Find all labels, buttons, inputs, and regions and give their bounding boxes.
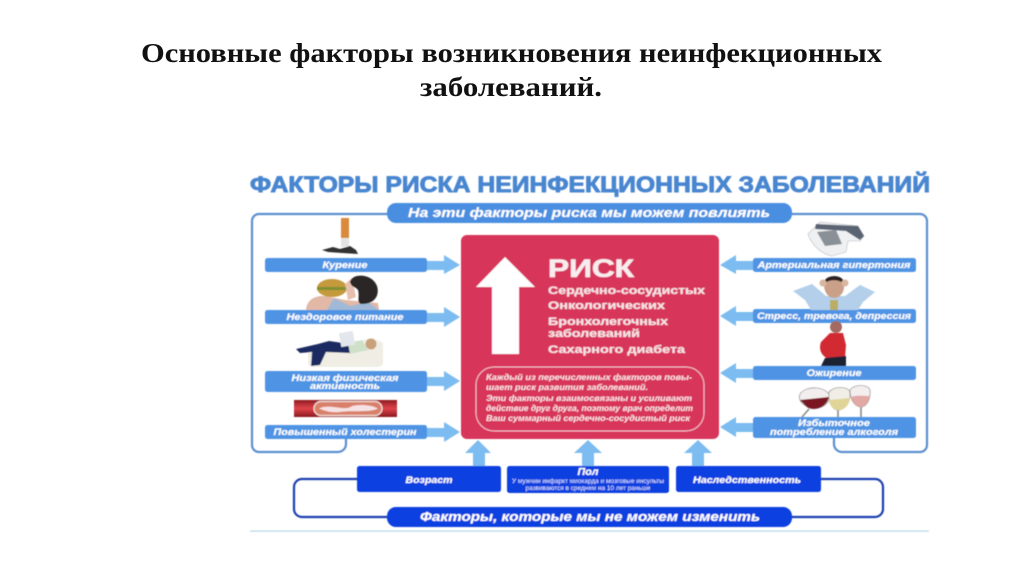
box: sex: развиваются в среднем на 10 лет раньше xyxy=(526,486,651,492)
box: age xyxy=(357,466,501,492)
risk note: действие друг друга, поэтому врач определит xyxy=(486,404,693,413)
arrows: left factors to risk xyxy=(427,255,460,442)
infographic xyxy=(250,172,930,532)
icon: person on sofa xyxy=(296,331,383,367)
bar: stress xyxy=(753,309,916,323)
bar: high cholesterol xyxy=(265,425,427,439)
frame: modifiable factors xyxy=(252,214,927,452)
pill: modifiable factors heading xyxy=(387,203,792,223)
slide title: Основные факторы возникновения неинфекционных xyxy=(141,38,883,68)
pill: fixed factors heading xyxy=(387,507,792,527)
icon: white up arrow xyxy=(476,257,535,354)
icon: stressed man xyxy=(793,276,875,310)
risk note: Эти факторы взаимосвязаны и усиливают xyxy=(486,394,692,403)
arrows: right factors to risk xyxy=(720,255,753,437)
box: age: Возраст xyxy=(406,475,453,486)
loop: fixed factors xyxy=(294,479,883,517)
bar: obesity xyxy=(753,366,916,380)
bar: smoking xyxy=(265,258,427,272)
box: sex: У мужчин инфаркт миокарда и мозговые инсульты xyxy=(512,479,664,485)
risk heading: РИСК xyxy=(548,255,635,283)
slide title: заболеваний. xyxy=(420,72,602,102)
bar: unhealthy diet: Нездоровое питание xyxy=(286,312,404,323)
risk diseases list: Онкологических xyxy=(548,300,666,312)
icon: wine glasses xyxy=(799,386,870,417)
bottom rule xyxy=(250,530,929,532)
box: sex: Пол xyxy=(578,467,599,478)
bar: low activity: активность xyxy=(310,381,380,392)
box: heredity xyxy=(676,466,821,492)
arrows: fixed factors up to risk xyxy=(465,440,712,466)
icon: obese person xyxy=(820,321,846,366)
risk note: Ваш суммарный сердечно-сосудистый риск xyxy=(486,414,691,423)
risk diseases list xyxy=(548,285,706,356)
box: sex xyxy=(507,466,669,493)
pill: fixed factors heading: Факторы, которые мы не можем изменить xyxy=(420,509,760,524)
risk diseases list: Сердечно-сосудистых xyxy=(548,285,706,297)
bar: obesity: Ожирение xyxy=(806,368,862,379)
panel: risk xyxy=(461,235,719,439)
slide title xyxy=(141,38,883,102)
pill: modifiable factors heading: На эти факторы риска мы можем повлиять xyxy=(408,206,770,220)
bar: low activity xyxy=(265,371,427,392)
risk note: шает риск развития заболеваний. xyxy=(486,383,648,392)
risk note xyxy=(476,367,704,431)
infographic heading: ФАКТОРЫ РИСКА НЕИНФЕКЦИОННЫХ ЗАБОЛЕВАНИЙ xyxy=(250,172,930,197)
icon: blood pressure monitor xyxy=(808,222,864,256)
icon: blood vessel xyxy=(294,400,397,417)
risk diseases list: заболеваний xyxy=(548,328,640,340)
bar: unhealthy diet xyxy=(265,310,427,324)
bar: alcohol: потребление алкоголя xyxy=(770,427,898,438)
bar: high cholesterol: Повышенный холестерин xyxy=(274,427,417,438)
icon: cigarette xyxy=(322,218,358,254)
icon: person eating burger xyxy=(306,276,379,310)
box: heredity: Наследственность xyxy=(693,475,801,486)
bar: alcohol xyxy=(753,417,916,438)
bar: smoking: Курение xyxy=(322,260,368,271)
risk diseases list: Бронхолегочных xyxy=(548,316,669,328)
bar: hypertension: Артериальная гипертония xyxy=(756,260,911,271)
risk diseases list: Сахарного диабета xyxy=(548,344,686,356)
risk note: Каждый из перечисленных факторов повы- xyxy=(486,373,692,382)
bar: alcohol: Избыточное xyxy=(798,418,871,429)
bar: hypertension xyxy=(753,258,916,272)
bar: stress: Стресс, тревога, депрессия xyxy=(757,311,911,322)
bar: low activity: Низкая физическая xyxy=(292,373,399,384)
